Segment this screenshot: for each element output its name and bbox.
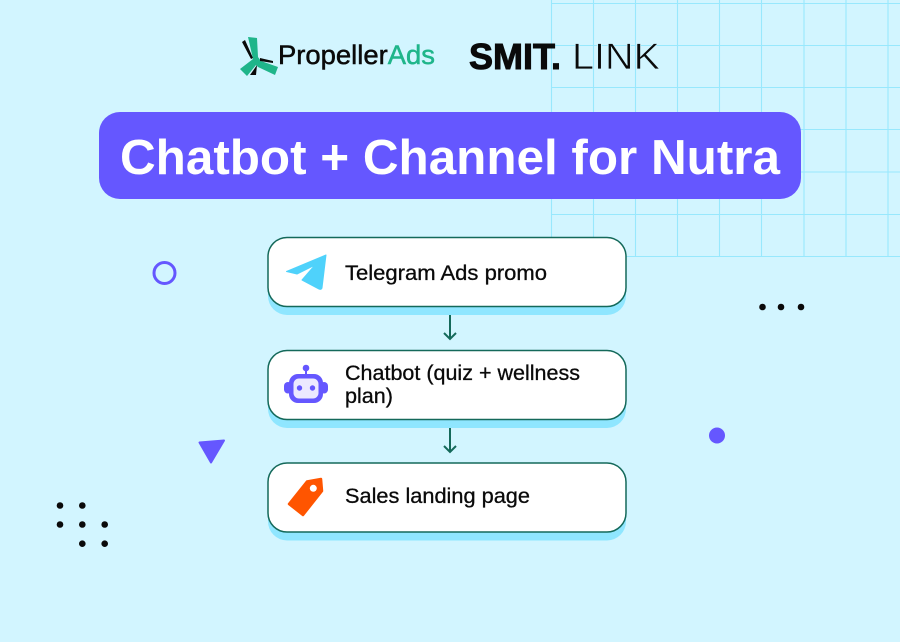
icon: propeller mark [240, 37, 278, 76]
wordmark light: LINK [572, 36, 660, 77]
label: Telegram Ads promo [345, 262, 547, 285]
arrow: promo to chatbot [444, 307, 456, 339]
icon: price tag [289, 479, 322, 515]
step 2: Chatbot: plan) [345, 385, 393, 408]
step 3: Sales landing page [268, 463, 626, 540]
arrow: chatbot to landing page [444, 420, 456, 452]
icon: paper plane [286, 255, 326, 289]
label: Sales landing page [345, 485, 530, 508]
decorative triangle [200, 440, 224, 462]
decorative dots bottom left [57, 502, 108, 547]
label: Chatbot (quiz + wellness [345, 362, 580, 385]
icon: robot [284, 365, 328, 403]
wordmark bold: SMIT. [469, 36, 561, 77]
logo: SMIT.LINK [469, 36, 660, 77]
title banner: Chatbot + Channel for Nutra [120, 131, 781, 185]
decorative dot [709, 428, 725, 444]
title banner [99, 112, 801, 199]
decorative ring [154, 262, 175, 284]
step 2: Chatbot [268, 350, 626, 428]
wordmark: PropellerAds [278, 40, 435, 70]
logo: PropellerAds [240, 37, 435, 76]
step 1: Telegram Ads promo [268, 238, 626, 315]
decorative dots top right [759, 304, 804, 310]
